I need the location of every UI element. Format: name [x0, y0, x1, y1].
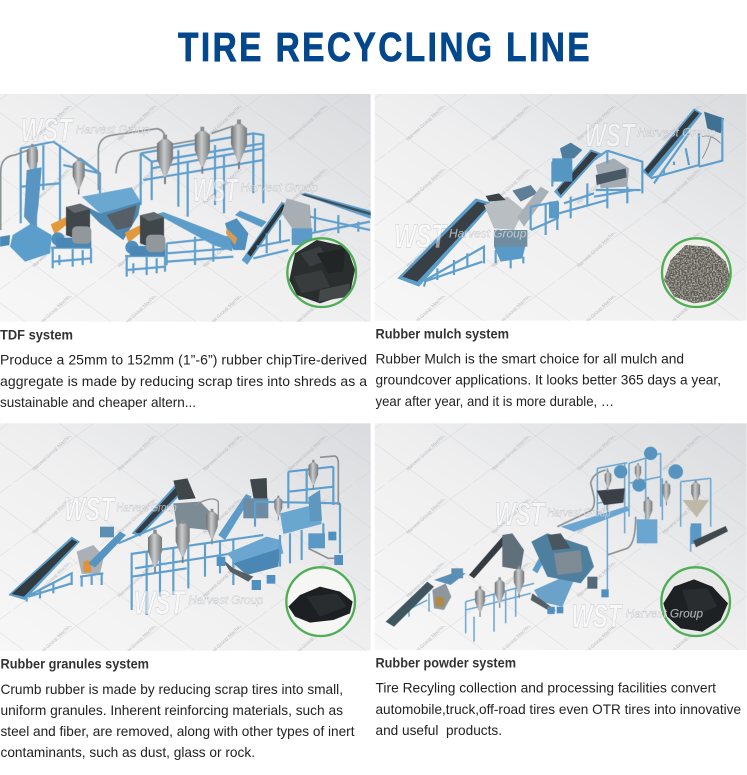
text: rubber granules description — [0, 681, 355, 760]
image: rubber mulch line — [375, 94, 747, 321]
image: rubber granules line — [0, 423, 371, 651]
text: TDF description: aggregate is made by reducing scrap tires into shreds as a — [0, 373, 367, 389]
watermark: WST logo lower: WST — [134, 585, 186, 622]
image: rubber powder line — [375, 423, 747, 650]
watermark: WST logo lower: Harvest Group — [449, 226, 527, 240]
text: rubber mulch description: groundcover applications. It looks better 365 days a year, — [376, 372, 721, 388]
watermark: WST logo centre: Harvest Group — [241, 180, 318, 194]
text: rubber powder description: Tire Recyling collection and processing facilities convert — [376, 680, 716, 696]
watermark: WST logo lower: Harvest Group — [188, 593, 264, 607]
watermark: WST logo upper: WST — [495, 496, 546, 533]
panel: Rubber powder system — [375, 423, 747, 738]
text: rubber granules description: steel and fiber, are removed, along with other types of inert — [0, 723, 355, 739]
product photo: rubber chips — [287, 238, 356, 307]
watermark: WST logo lower — [134, 585, 264, 622]
watermark: WST logo upper: WST — [585, 118, 636, 155]
product photo: rubber powder — [626, 567, 730, 636]
text: rubber granules description: contaminants, such as dust, glass or rock. — [0, 744, 255, 760]
panel: Rubber mulch system — [375, 94, 747, 409]
watermark: WST logo upper — [21, 113, 150, 150]
text: rubber mulch description — [376, 351, 721, 409]
panel: Rubber granules system — [0, 423, 371, 760]
watermark: WST logo upper — [495, 496, 611, 533]
product photo: steel wire mulch — [662, 238, 732, 307]
title: TIRE RECYCLING LINE — [178, 24, 592, 70]
watermark: WST logo upper: Harvest Group — [117, 501, 177, 515]
watermark: WST logo upper: WST — [21, 113, 74, 150]
watermark: WST logo upper — [64, 492, 177, 529]
text: rubber powder description — [376, 680, 741, 738]
heading: TDF system: TDF system — [0, 326, 73, 342]
panel: TDF system — [0, 94, 371, 410]
image: TDF system line — [0, 94, 371, 322]
watermark: WST logo upper: WST — [64, 492, 116, 529]
watermark: WST logo upper: Harvest Group — [637, 126, 716, 140]
text: rubber mulch description: Rubber Mulch is the smart choice for all mulch and — [376, 351, 684, 367]
watermark: WST logo lower — [394, 218, 527, 255]
heading: Rubber granules system: Rubber granules system — [0, 656, 149, 672]
text: TDF description: sustainable and cheaper altern... — [0, 394, 196, 410]
watermark: WST logo centre — [193, 173, 318, 210]
watermark: WST logo upper: Harvest Group — [547, 506, 611, 520]
text: rubber powder description: automobile,truck,off-road tires even OTR tires into innovative — [376, 701, 741, 717]
text: rubber powder description: and useful products. — [376, 722, 502, 738]
watermark: WST logo lower: WST — [571, 598, 623, 635]
watermark: WST logo lower: WST — [394, 218, 448, 255]
watermark: WST logo centre: WST — [193, 173, 239, 210]
text: TDF description — [0, 352, 367, 410]
text: rubber granules description: uniform granules. Inherent reinforcing materials, such as — [0, 702, 343, 718]
text: rubber granules description: Crumb rubber is made by reducing scrap tires into small, — [0, 681, 343, 697]
watermark: Harvest Group over photo: Harvest Group — [626, 606, 703, 620]
watermark: WST logo upper — [585, 118, 716, 155]
product photo: rubber granules — [286, 567, 355, 636]
watermark: WST logo upper: Harvest Group — [76, 122, 150, 136]
heading: Rubber mulch system: Rubber mulch system — [376, 326, 509, 342]
text: TDF description: Produce a 25mm to 152mm (1”-6”) rubber chipTire-derived — [0, 352, 367, 368]
heading: Rubber powder system: Rubber powder system — [376, 654, 516, 670]
text: rubber mulch description: year after year, and it is more durable, … — [376, 393, 614, 409]
